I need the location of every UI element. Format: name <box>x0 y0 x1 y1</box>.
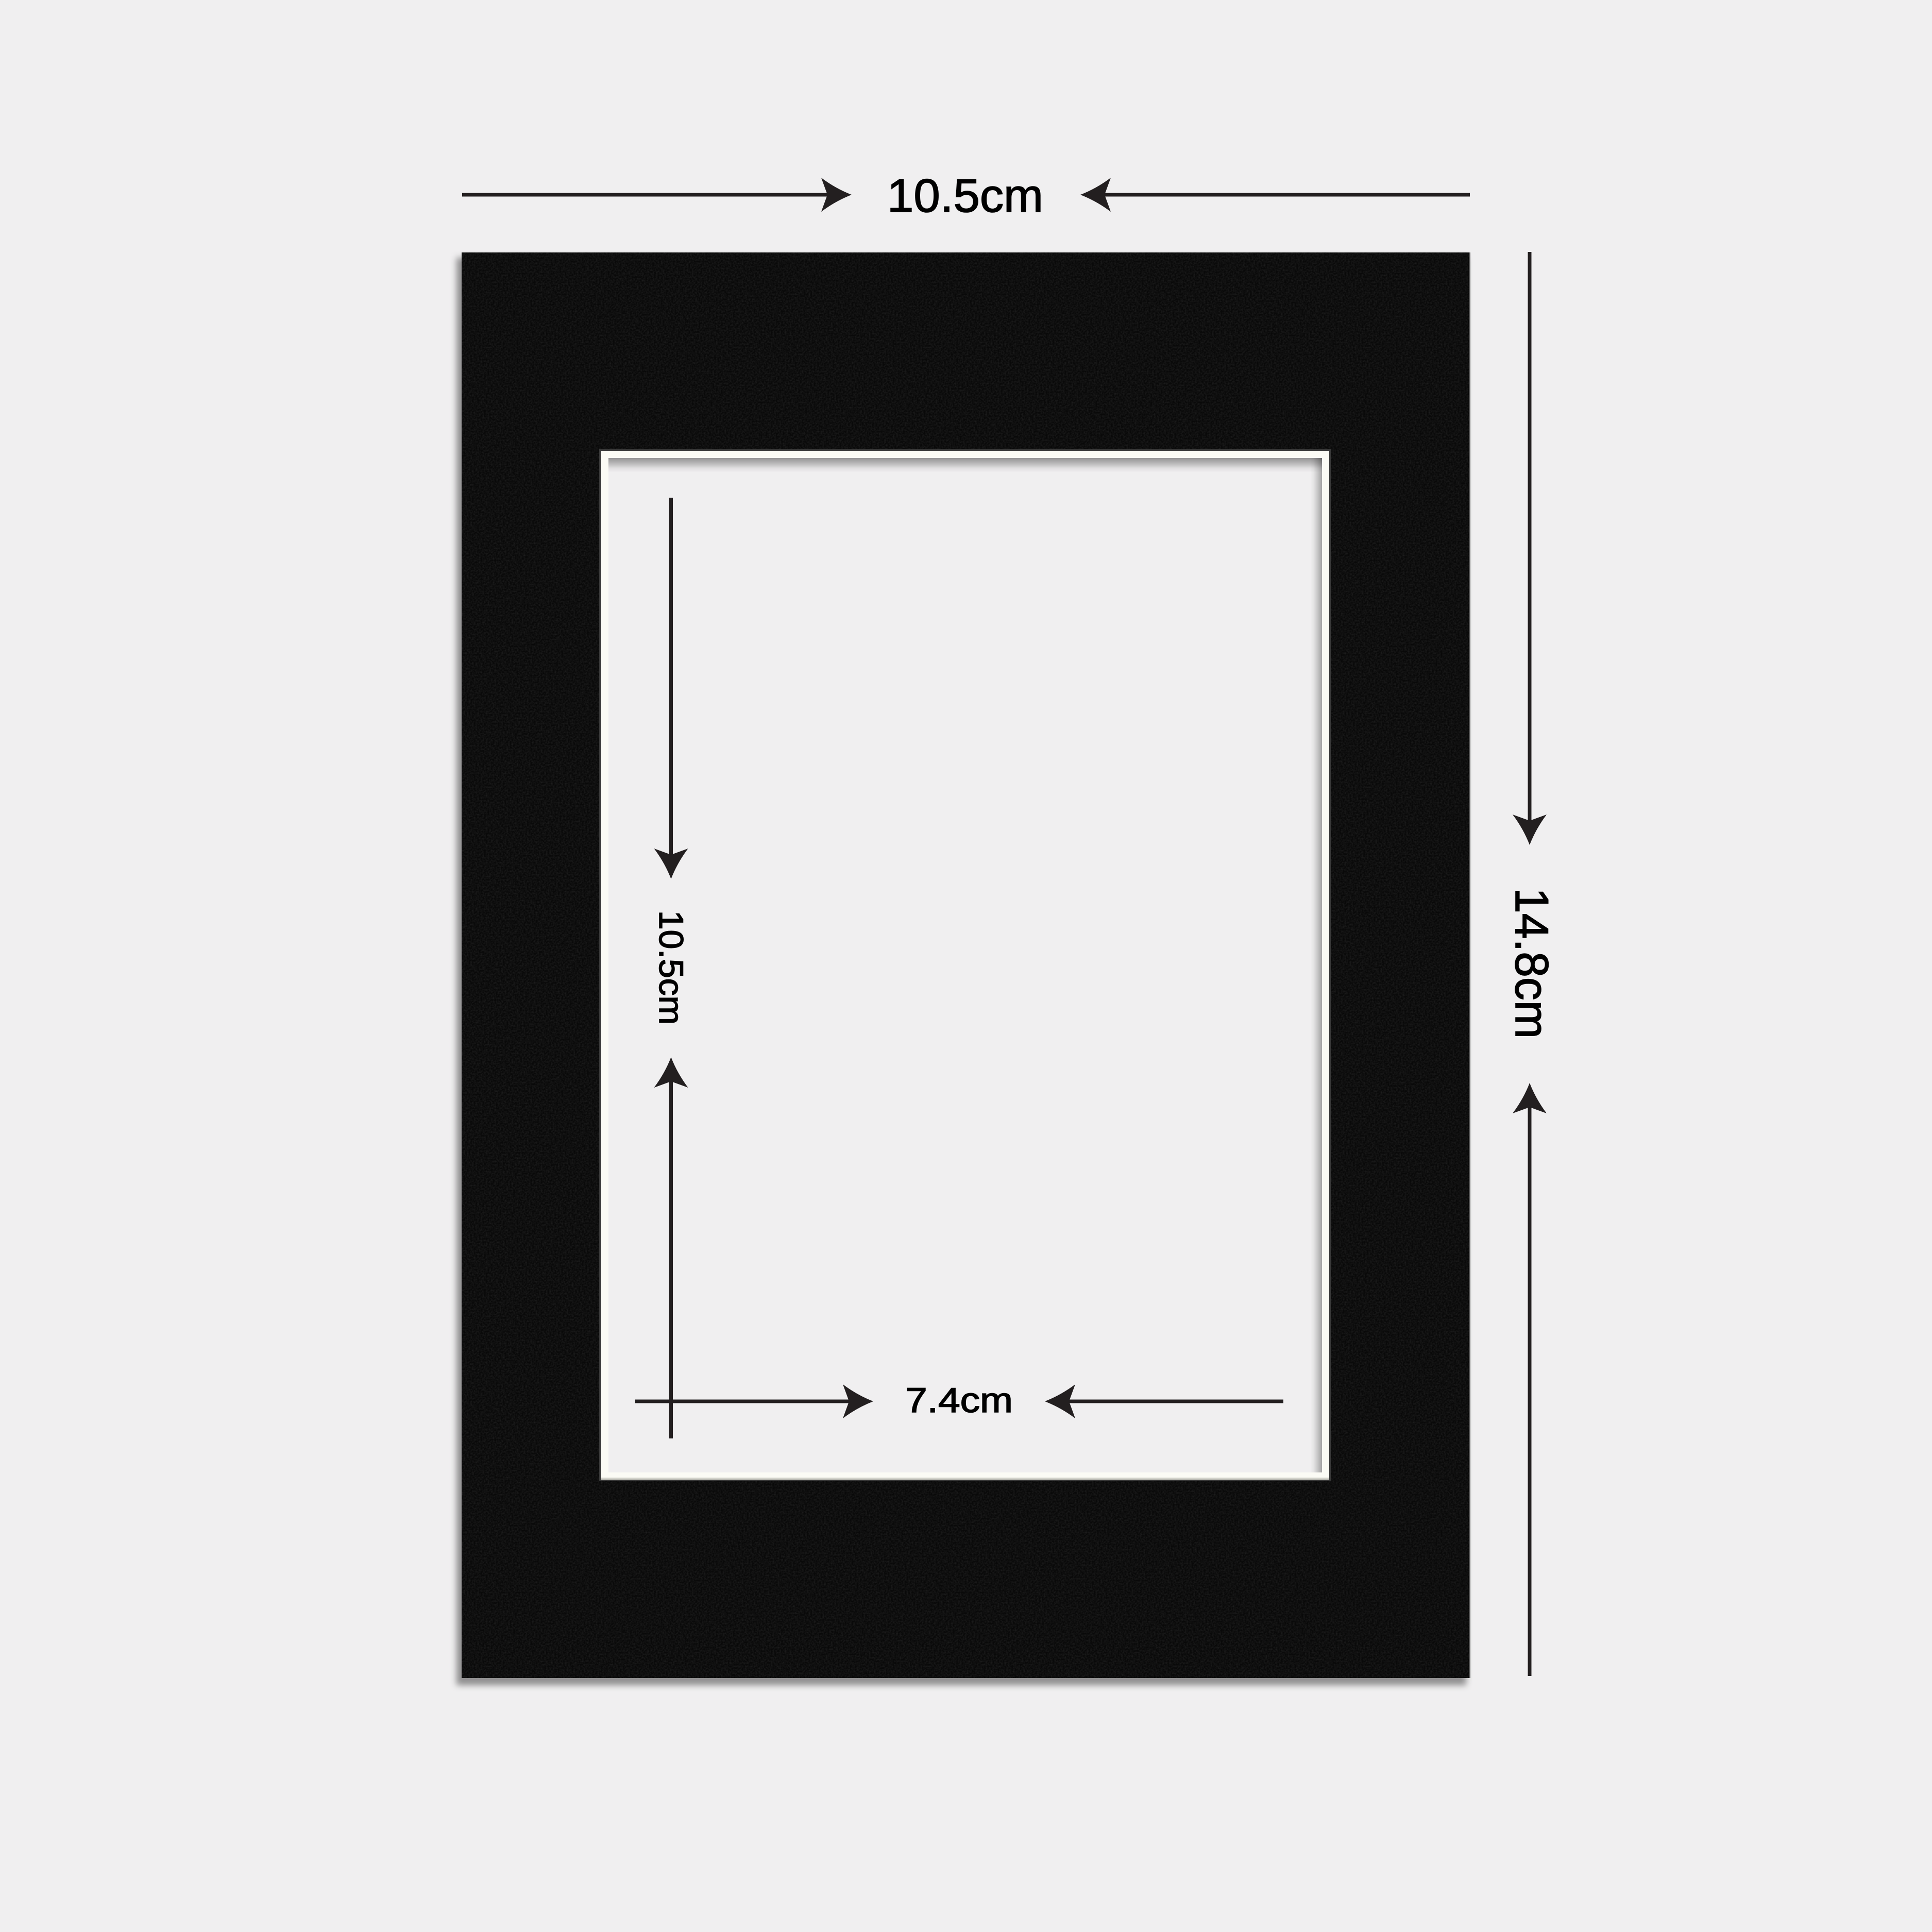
window opening <box>608 458 1322 1472</box>
inner height label: 10.5cm <box>652 910 690 1025</box>
arrow: inner width right <box>1045 1384 1283 1418</box>
mount drop shadow <box>456 258 1466 1685</box>
outer height label: 14.8cm <box>1505 888 1557 1039</box>
arrow: inner width left <box>635 1384 873 1418</box>
inner width label: 7.4cm <box>905 1381 1013 1420</box>
arrow: outer height top <box>1513 252 1547 845</box>
arrow: top width left <box>462 178 852 212</box>
arrow: inner height top <box>654 498 688 879</box>
bevel edge <box>599 449 1331 1481</box>
panel: black photo mount <box>456 252 1470 1685</box>
mount board <box>462 252 1469 1678</box>
arrow: inner height bottom <box>654 1057 688 1438</box>
window aperture <box>599 449 1331 1481</box>
outer width label: 10.5cm <box>887 170 1043 222</box>
inner shadow top <box>608 458 1322 472</box>
arrow: outer height bottom <box>1513 1083 1547 1676</box>
arrow: top width right <box>1080 178 1470 212</box>
inner shadow right <box>1310 458 1322 1472</box>
